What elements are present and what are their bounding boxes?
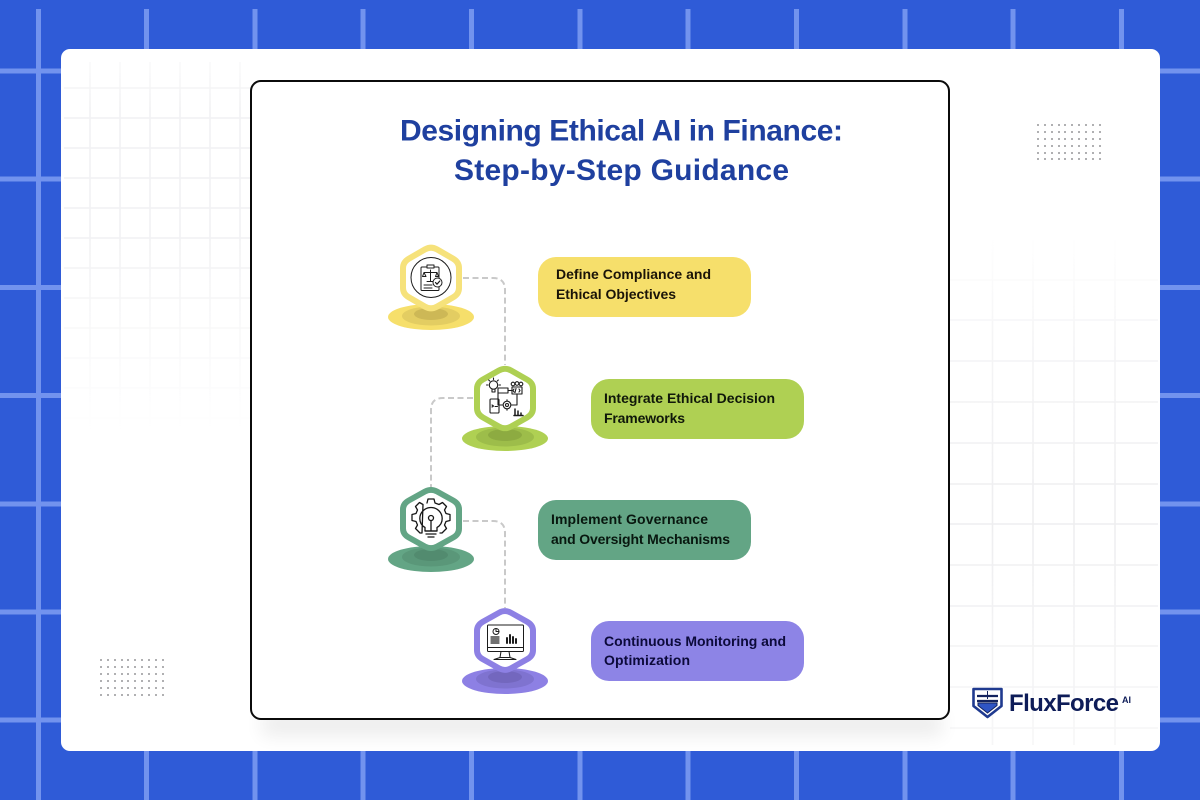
icon: monitor with charts: [488, 625, 524, 660]
step 3 marker: [388, 490, 474, 572]
dashed connector: step 3 to step 4: [463, 521, 505, 608]
step 2 base ellipses: [462, 426, 548, 451]
pill: Define Compliance and Ethical Objectives: Define Compliance and: [556, 266, 711, 282]
pill: Implement Governance and Oversight Mechanisms: [538, 500, 751, 560]
inner panel: [251, 81, 949, 719]
step 3 hexagon: [403, 490, 459, 548]
icon: clipboard with scales and check: [411, 258, 451, 298]
step 4 hexagon: [477, 611, 533, 670]
inner panel shadow: [262, 712, 942, 736]
step 2 marker: [462, 369, 548, 451]
step 1 marker: [388, 248, 474, 330]
pill: Continuous Monitoring and Optimization: Optimization: [604, 652, 690, 668]
pill: Implement Governance and Oversight Mechanisms: and Oversight Mechanisms: [551, 531, 730, 547]
step 1 hexagon: [403, 248, 459, 308]
icon: workflow with bulb, code and gear: [486, 378, 523, 416]
title: Step-by-Step Guidance: [454, 154, 789, 187]
pill: Integrate Ethical Decision Frameworks: Integrate Ethical Decision: [604, 390, 775, 406]
faint grid: upper left of card: [64, 78, 250, 312]
dot pattern: top right: [1037, 124, 1101, 160]
step 1 base ellipses: [388, 304, 474, 330]
dot pattern: bottom left: [100, 659, 164, 696]
pill: Implement Governance and Oversight Mechanisms: Implement Governance: [551, 511, 708, 527]
dashed connector: step 2 to step 3: [431, 398, 473, 487]
pill: Integrate Ethical Decision Frameworks: [591, 379, 804, 439]
title: [400, 114, 843, 187]
pill: Continuous Monitoring and Optimization: [591, 621, 804, 681]
pill: Define Compliance and Ethical Objectives: [538, 257, 751, 317]
icon: shield: [974, 689, 1002, 717]
logo superscript: AI: [1122, 695, 1131, 705]
pill: Continuous Monitoring and Optimization: Continuous Monitoring and: [604, 633, 786, 649]
step 4 base ellipses: [462, 668, 548, 694]
dashed connector: step 1 to step 2: [463, 278, 505, 365]
step 3 base ellipses: [388, 546, 474, 572]
pill: Integrate Ethical Decision Frameworks: Frameworks: [604, 410, 685, 426]
step 4 marker: [462, 611, 548, 694]
logo: FluxForce AI: [974, 689, 1131, 717]
step 2 hexagon: [477, 369, 533, 428]
faint grid: lower right of card: [950, 321, 1158, 745]
logo wordmark: FluxForce: [1009, 690, 1119, 717]
pill: Define Compliance and Ethical Objectives: Ethical Objectives: [556, 286, 676, 302]
icon: gear with light bulb: [412, 499, 450, 537]
title: Designing Ethical AI in Finance:: [400, 114, 843, 148]
